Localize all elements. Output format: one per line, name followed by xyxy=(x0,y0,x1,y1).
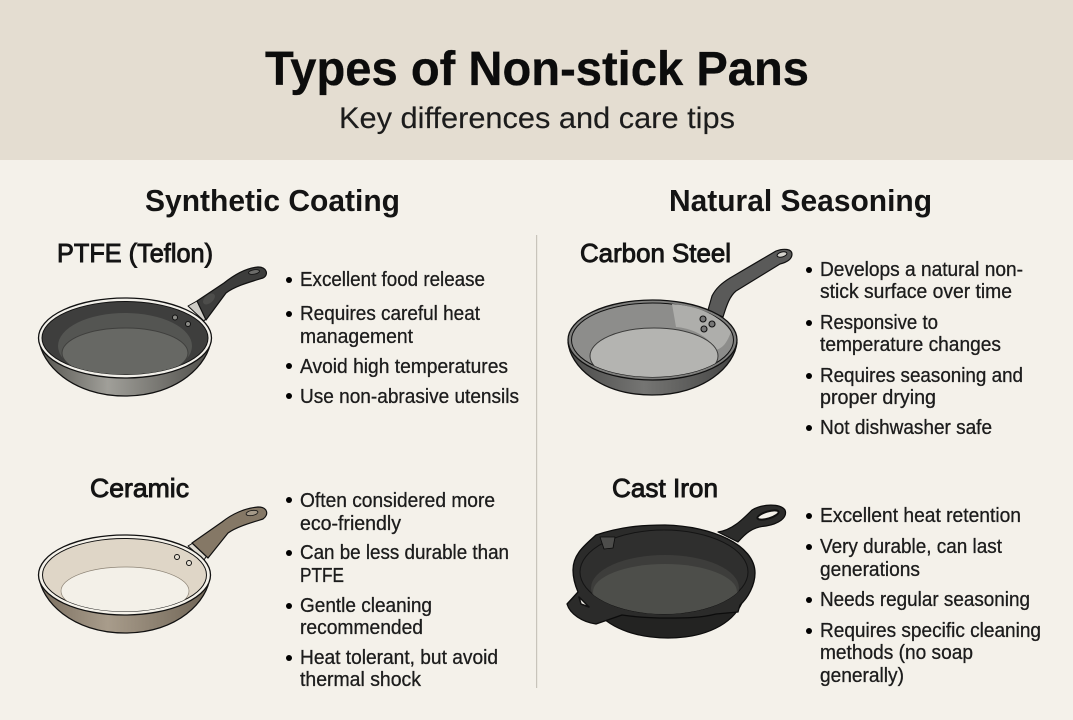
label: Cast Iron: Cast Iron xyxy=(612,473,718,503)
list: cast iron points xyxy=(806,505,1041,687)
list: ceramic points: PTFE xyxy=(300,565,344,587)
panel: Cast Iron xyxy=(567,473,1041,687)
list: carbon steel points: Requires seasoning and xyxy=(820,365,1023,387)
list: cast iron points: Very durable, can last xyxy=(820,536,1002,558)
list: carbon steel points: stick surface over time xyxy=(820,281,1012,303)
list: PTFE points: Requires careful heat xyxy=(300,303,480,325)
list: carbon steel points: proper drying xyxy=(820,387,936,409)
icon: carbon steel pan xyxy=(568,249,792,395)
list: carbon steel points: temperature changes xyxy=(820,334,1001,356)
icon: PTFE pan xyxy=(38,267,266,396)
list: carbon steel points: Responsive to xyxy=(820,312,938,334)
list: carbon steel points: Not dishwasher safe xyxy=(820,417,992,439)
label: Ceramic: Ceramic xyxy=(90,473,189,503)
list: cast iron points: generations xyxy=(820,559,920,581)
list: ceramic points: Heat tolerant, but avoid xyxy=(300,647,498,669)
label: PTFE: PTFE (Teflon) xyxy=(57,238,213,268)
list: ceramic points: eco-friendly xyxy=(300,513,401,535)
icon: ceramic pan xyxy=(38,507,267,633)
list: cast iron points: Needs regular seasoning xyxy=(820,589,1030,611)
list: carbon steel points: Develops a natural non- xyxy=(820,259,1023,281)
list: cast iron points: Excellent heat retention xyxy=(820,505,1021,527)
list: carbon steel points xyxy=(806,259,1023,439)
heading: natural seasoning: Natural Seasoning xyxy=(669,183,932,218)
list: ceramic points: Gentle cleaning xyxy=(300,595,432,617)
list: cast iron points: generally) xyxy=(820,665,904,687)
list: PTFE points: Avoid high temperatures xyxy=(300,356,508,378)
list: ceramic points: recommended xyxy=(300,617,423,639)
icon: cast iron pan xyxy=(567,505,786,638)
list: PTFE points xyxy=(286,269,519,408)
list: ceramic points xyxy=(286,490,509,691)
header band xyxy=(0,0,1073,160)
list: PTFE points: Excellent food release xyxy=(300,269,485,291)
list: cast iron points: methods (no soap xyxy=(820,642,973,664)
list: ceramic points: Often considered more xyxy=(300,490,495,512)
list: PTFE points: Use non-abrasive utensils xyxy=(300,386,519,408)
label: Carbon Steel: Carbon Steel xyxy=(580,238,731,268)
panel: Carbon Steel xyxy=(568,238,1023,439)
panel: Ceramic xyxy=(38,473,509,691)
panel: PTFE xyxy=(38,238,519,408)
subtitle: Key differences and care tips xyxy=(339,102,735,135)
heading: synthetic coating: Synthetic Coating xyxy=(145,183,400,218)
list: cast iron points: Requires specific cleaning xyxy=(820,620,1041,642)
list: ceramic points: Can be less durable than xyxy=(300,542,509,564)
list: ceramic points: thermal shock xyxy=(300,669,422,691)
title: Types of Non-stick Pans xyxy=(265,43,809,96)
list: PTFE points: management xyxy=(300,326,413,348)
